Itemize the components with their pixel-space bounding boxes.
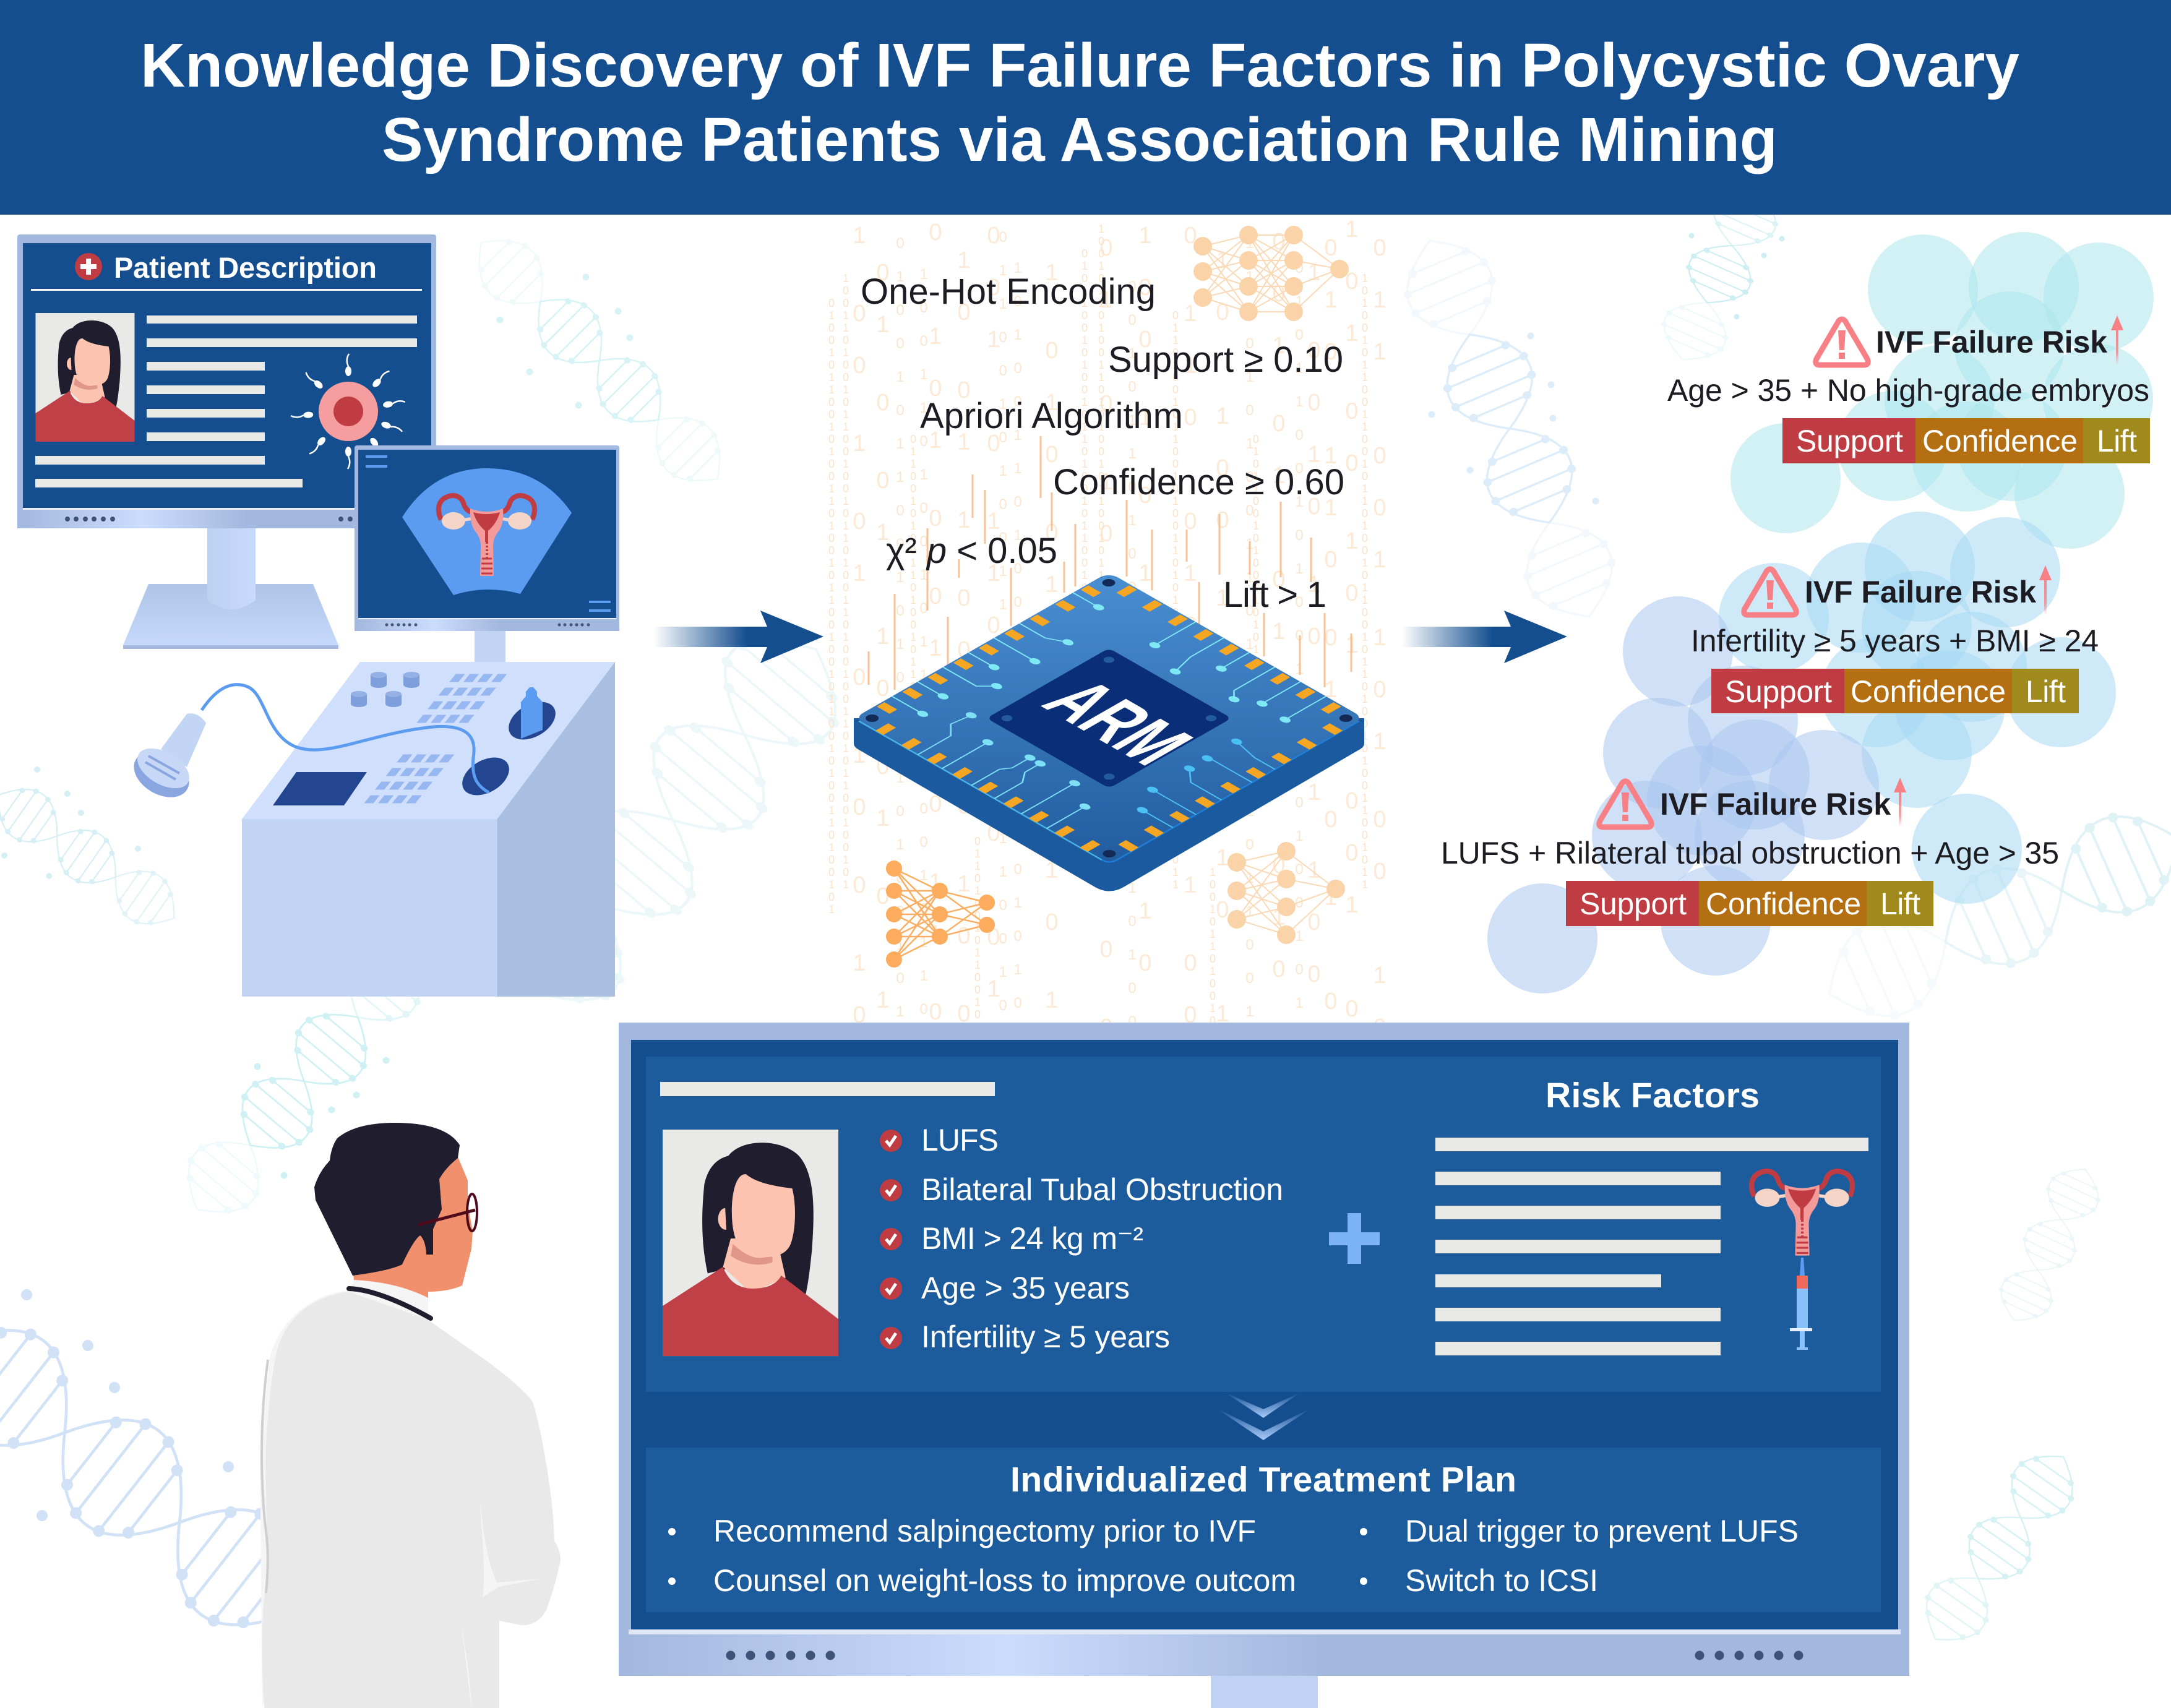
background: binary code rain: 1 0 1 0 0 1 1 0 1 0 0 1 0 1 0 1 1 0 0 1 0 1 0 0 1 1 0 bbox=[1010, 260, 1026, 1145]
background: binary code rain: 0 0 1 0 1 1 0 1 0 0 1 0 1 1 0 0 1 0 1 0 1 0 0 1 1 0 bbox=[1124, 278, 1141, 1130]
neural network: bottom left bbox=[886, 860, 995, 968]
rule heading: IVF Failure Risk bbox=[1805, 575, 2036, 609]
icon: uterus bbox=[1752, 1171, 1852, 1256]
background: binary code rain: 1 0 1 0 0 1 1 0 0 1 0 1 0 1 0 0 1 1 0 bbox=[1210, 247, 1236, 1417]
plus sign bbox=[1329, 1213, 1380, 1264]
record lines bbox=[35, 315, 417, 487]
text: algorithm parameters: Apriori Algorithm bbox=[920, 396, 1183, 436]
background: binary code rain: 10100101100110010110100101100101101001010011001011 bbox=[1359, 272, 1371, 891]
background: cyan circles bbox=[1730, 232, 2154, 549]
background: binary code rain: 10011010010110010010110100110100100110101100100101 bbox=[840, 272, 852, 891]
icon: egg and sperm bbox=[291, 354, 405, 469]
background: binary code rain bbox=[825, 217, 1393, 1600]
background: binary code rain: 010110010100110101 bbox=[1250, 433, 1262, 656]
rule 2 bbox=[1691, 565, 2099, 713]
chevron arrows bbox=[1216, 1393, 1312, 1440]
patient portrait bbox=[36, 313, 135, 442]
background: light-blue circles bbox=[1719, 512, 2116, 904]
text: algorithm parameters: One-Hot Encoding bbox=[861, 272, 1156, 312]
treatment bullets: Recommend salpingectomy prior to IVF bbox=[713, 1514, 1256, 1548]
icon: warning bbox=[1599, 781, 1651, 827]
background: binary code rain: 1 0 1 0 0 1 0 1 1 0 0 1 0 1 0 0 1 1 0 1 bbox=[1339, 217, 1365, 1412]
metric badges: Support bbox=[1580, 886, 1687, 921]
rule 1 bbox=[1667, 315, 2150, 463]
rule conditions: LUFS + Rilateral tubal obstruction + Age > 35 bbox=[1441, 836, 2059, 870]
metric badges: Support bbox=[1796, 424, 1903, 458]
background: binary code rain: 01011001010010110100101100101010011010010110010010 bbox=[1078, 247, 1091, 866]
background: binary code rain: 1 1 0 0 1 0 1 0 0 1 1 0 1 0 1 0 0 1 0 1 1 0 0 1 0 1 0 bbox=[1241, 235, 1258, 1120]
metric badges: Lift bbox=[2026, 674, 2066, 709]
background: binary code rain: 0 1 0 1 1 0 0 1 0 0 1 0 1 0 0 1 0 1 1 bbox=[1318, 235, 1344, 1378]
arrow: risk increase bbox=[2039, 565, 2052, 615]
ARM chip bbox=[854, 572, 1364, 891]
background: binary code rain: 0 1 1 0 0 1 0 0 1 0 1 0 0 1 0 1 1 0 0 1 bbox=[1177, 223, 1203, 1444]
arrow: risk increase bbox=[1894, 778, 1906, 827]
neural network: bottom right bbox=[1227, 842, 1345, 944]
text: algorithm parameters: Lift > 1 bbox=[1223, 575, 1326, 615]
background: binary code rain: 1 0 0 1 0 1 0 0 1 1 0 0 1 0 1 1 0 0 1 bbox=[1301, 260, 1327, 1403]
treatment bullets bbox=[668, 1514, 1799, 1598]
illustration: ultrasound machine bbox=[126, 445, 619, 997]
icon: warning bbox=[1744, 569, 1796, 615]
flow arrow: ARM to rules bbox=[1401, 611, 1567, 663]
rule heading: IVF Failure Risk bbox=[1876, 325, 2107, 359]
flow arrow: machine to ARM bbox=[653, 611, 823, 663]
gel bottle bbox=[521, 687, 543, 739]
doctor figure bbox=[260, 1123, 561, 1708]
risk factor checklist bbox=[880, 1123, 1283, 1354]
risk factor checklist: Age > 35 years bbox=[921, 1271, 1130, 1305]
risk factor checklist: Bilateral Tubal Obstruction bbox=[921, 1172, 1283, 1207]
console keypads bbox=[368, 678, 504, 799]
illustration: patient monitor bbox=[17, 234, 436, 649]
rule conditions: Infertility ≥ 5 years + BMI ≥ 24 bbox=[1691, 624, 2099, 658]
chip label: ARM bbox=[1025, 668, 1212, 776]
metric badges: Support bbox=[1725, 674, 1832, 709]
treatment bullets: Counsel on weight-loss to improve outcom bbox=[713, 1563, 1296, 1598]
rule conditions: Age > 35 + No high-grade embryos bbox=[1667, 373, 2149, 408]
probe cable bbox=[202, 685, 489, 792]
text: algorithm parameters: χ² p < 0.05 bbox=[886, 531, 1057, 571]
background: binary code rain: 1 0 0 1 1 0 1 0 0 1 0 1 1 0 0 1 0 0 1 0 1 1 0 1 0 0 1 bbox=[916, 266, 932, 1151]
background: binary code rain: 0 1 0 0 1 0 1 1 0 0 1 0 1 0 0 1 1 0 1 0 0 1 0 1 1 0 0 1 bbox=[892, 235, 908, 1154]
text: algorithm parameters: Support ≥ 0.10 bbox=[1108, 340, 1343, 380]
icon: medical cross bbox=[75, 253, 102, 280]
background: binary code rain: 01101001011001010011010100101101001100101001011 bbox=[1169, 309, 1182, 891]
title: Syndrome Patients via Association Rule Mining bbox=[382, 105, 1778, 174]
title: Knowledge Discovery of IVF Failure Factors in Polycystic Ovary bbox=[140, 31, 2019, 100]
metric badges: Lift bbox=[1880, 886, 1920, 921]
metric badges bbox=[1711, 669, 2079, 713]
metric badges: Confidence bbox=[1851, 674, 2006, 709]
ultrasound fan image bbox=[402, 468, 572, 595]
background: binary code rain: 1001011010010110 bbox=[1206, 866, 1219, 1064]
console knobs bbox=[351, 672, 419, 707]
background: binary code rain: 0 1 0 1 0 0 1 0 0 1 1 0 0 1 0 1 0 1 0 0 bbox=[922, 220, 948, 1493]
background: binary code rain: 0 0 1 0 1 1 0 0 1 0 0 1 0 1 0 0 1 0 1 0 bbox=[981, 223, 1007, 1470]
background: binary code rain: 10010110100110101001011001011001001101001011001010 bbox=[1095, 223, 1107, 841]
header banner with title bbox=[0, 0, 2171, 215]
background: binary code rain: 0 1 0 1 0 0 1 0 1 1 0 0 1 0 1 0 0 1 0 bbox=[1093, 235, 1119, 1430]
heading: patient description: Patient Description bbox=[114, 251, 377, 284]
console body bbox=[242, 662, 615, 997]
neural network: top right bbox=[1193, 226, 1349, 321]
background: binary code rain: 1 0 1 0 0 1 1 0 0 1 0 1 0 0 1 0 1 1 0 bbox=[1039, 260, 1065, 1403]
background: binary code rain: 0 1 0 1 1 0 0 1 0 1 0 0 1 0 1 1 0 1 0 0 1 0 1 1 0 0 bbox=[1291, 260, 1308, 1112]
background: binary code rain: 1 0 0 1 0 1 0 1 0 0 1 0 1 0 0 1 0 1 1 0 bbox=[1132, 223, 1158, 1444]
metric badges bbox=[1566, 881, 1933, 926]
metric badges bbox=[1782, 418, 2150, 463]
icon: uterus bbox=[439, 496, 535, 576]
rule 3 bbox=[1441, 778, 2059, 926]
background: binary code rain: 0110010100110100101100101011 bbox=[907, 433, 919, 779]
text: algorithm parameters bbox=[861, 272, 1344, 615]
icon: warning bbox=[1816, 319, 1868, 365]
treatment bullets: Dual trigger to prevent LUFS bbox=[1405, 1514, 1799, 1548]
background: periwinkle circles bbox=[1487, 596, 1879, 993]
background: binary code rain: 0 0 1 0 1 0 1 1 0 0 1 0 0 1 1 0 1 0 0 1 bbox=[1266, 229, 1292, 1450]
metric badges: Lift bbox=[2097, 424, 2137, 458]
background: binary code rain: 0 1 0 0 1 1 0 0 1 0 1 0 0 1 0 0 1 1 0 bbox=[870, 260, 896, 1481]
panel: treatment plan bbox=[646, 1448, 1881, 1612]
chip circuit traces bbox=[892, 572, 1326, 820]
treatment bullets: Switch to ICSI bbox=[1405, 1563, 1598, 1598]
background: binary code rain: 0 1 1 0 0 1 1 0 1 0 0 1 0 1 1 0 0 1 0 bbox=[1367, 235, 1393, 1378]
background: binary code rain: 1 0 0 1 0 1 0 1 0 0 1 0 1 0 0 1 0 1 0 0 1 bbox=[846, 223, 872, 1600]
heading: risk factors: Risk Factors bbox=[1545, 1076, 1760, 1115]
patient portrait bbox=[663, 1130, 838, 1356]
background: binary code rain: 1 0 0 1 1 0 0 1 0 1 0 0 1 0 1 1 0 0 1 bbox=[951, 247, 977, 1443]
risk factor checklist: BMI > 24 kg m⁻² bbox=[921, 1221, 1143, 1256]
metric badges: Confidence bbox=[1922, 424, 2078, 458]
risk factor checklist: LUFS bbox=[921, 1123, 999, 1157]
background: binary code rain: 0 1 1 0 0 1 0 1 0 0 1 1 0 1 0 0 1 0 1 1 0 0 1 0 1 0 1 1 bbox=[995, 229, 1011, 1148]
icon: syringe bbox=[1790, 1258, 1812, 1350]
panel: risk factors bbox=[646, 1057, 1881, 1392]
report lines bbox=[1435, 1138, 1868, 1355]
treatment monitor bbox=[619, 1023, 1909, 1708]
console display bbox=[273, 772, 367, 805]
risk factor checklist: Infertility ≥ 5 years bbox=[921, 1320, 1170, 1354]
orange data lines above chip bbox=[869, 436, 1351, 690]
background: binary code rain: 01001011001010011010010110010010110010100110100101 bbox=[825, 297, 838, 916]
background: binary code rain: 0110100101100101001 bbox=[971, 835, 984, 1070]
metric badges: Confidence bbox=[1706, 886, 1861, 921]
rule heading: IVF Failure Risk bbox=[1660, 787, 1891, 822]
arrow: risk increase bbox=[2111, 315, 2123, 365]
text: algorithm parameters: Confidence ≥ 0.60 bbox=[1053, 462, 1344, 502]
ultrasound probe bbox=[126, 713, 206, 807]
heading: treatment plan: Individualized Treatment Plan bbox=[1010, 1460, 1516, 1500]
